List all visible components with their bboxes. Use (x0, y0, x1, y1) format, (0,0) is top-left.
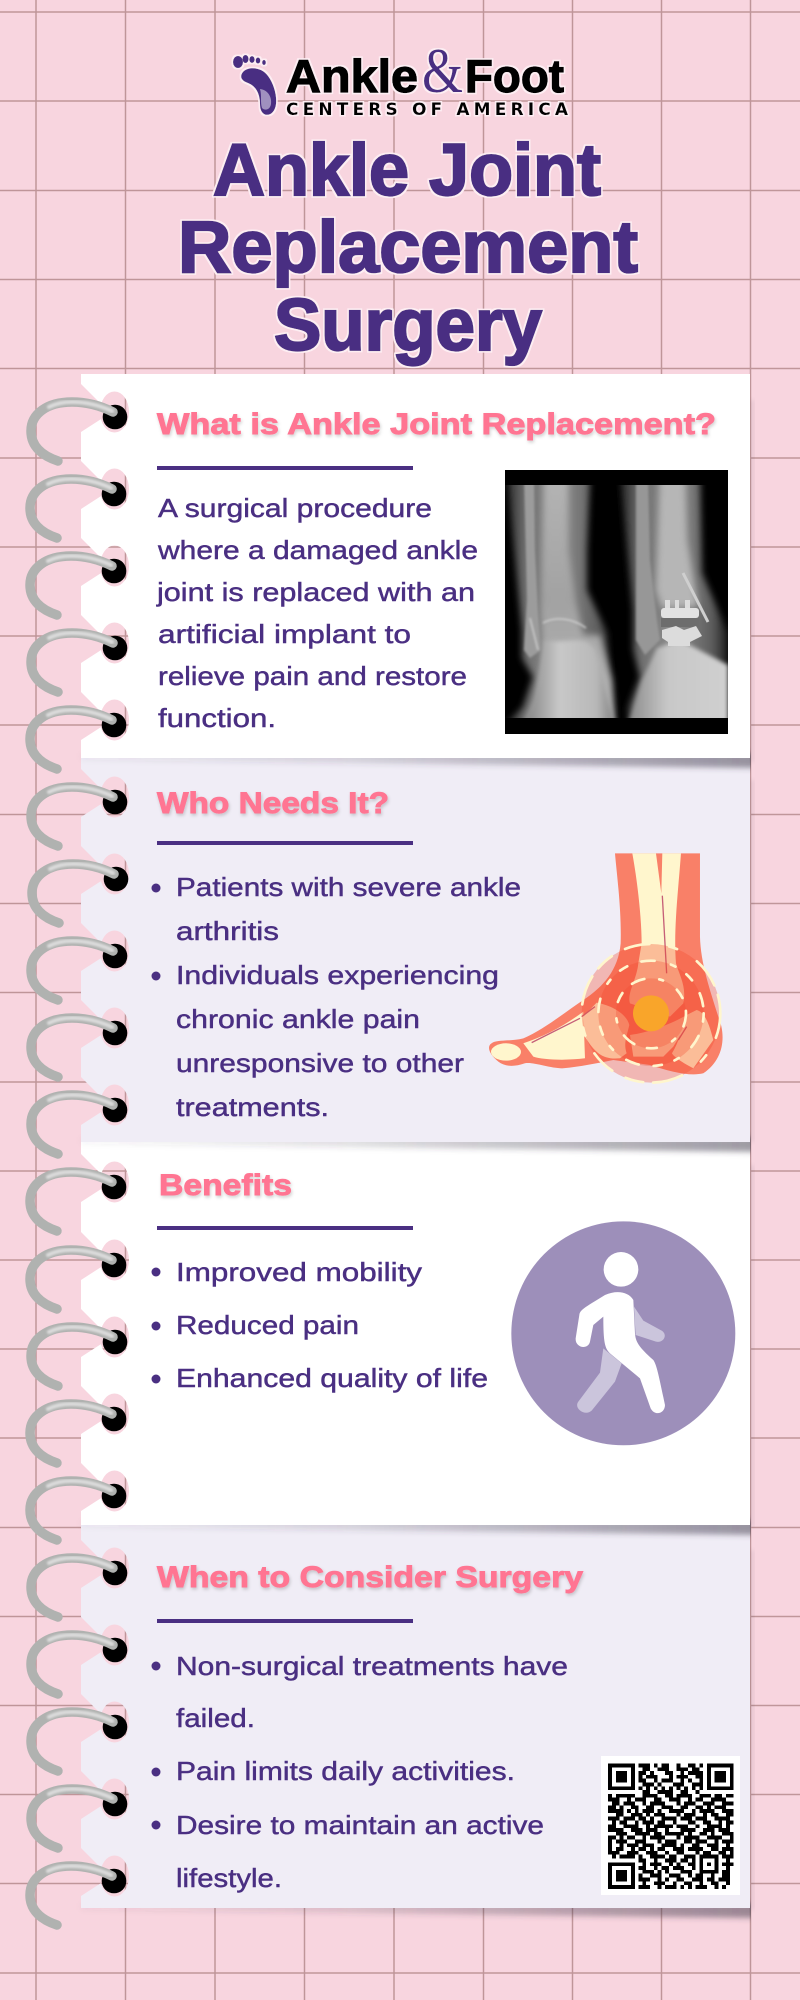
definition text: where a damaged ankle (157, 535, 478, 565)
heading: Benefits (159, 1169, 292, 1202)
bullet list: treatments. (176, 1092, 329, 1122)
title: Ankle Joint (213, 130, 601, 211)
panel: who needs it (81, 758, 760, 1152)
icon: footprint (233, 55, 276, 115)
definition text: artificial implant to (158, 619, 411, 649)
bullet list: lifestyle. (176, 1863, 282, 1893)
heading: When to Consider Surgery (157, 1561, 583, 1594)
bullet list: Desire to maintain an active (176, 1810, 544, 1840)
bullet list (152, 872, 521, 1122)
panel: benefits (81, 1142, 760, 1535)
heading: Who Needs It? (157, 787, 389, 820)
bullet list: Improved mobility (176, 1257, 422, 1287)
definition text: relieve pain and restore (158, 661, 467, 691)
divider (157, 1226, 413, 1230)
logo wordmark: Foot (465, 50, 564, 102)
definition text (156, 493, 478, 733)
spiral binding rings (30, 402, 128, 1925)
illustration: inflamed ankle joint (489, 853, 723, 1083)
bullet list: Enhanced quality of life (176, 1363, 488, 1393)
bullet list (152, 1257, 488, 1393)
image: ankle x-ray before and after implant (505, 470, 728, 734)
bullet list: Reduced pain (176, 1310, 359, 1340)
logo wordmark: CENTERS OF AMERICA (286, 100, 569, 120)
bullet list: Pain limits daily activities. (176, 1756, 515, 1786)
logo wordmark: & (422, 35, 463, 106)
bullet list: Individuals experiencing (176, 960, 499, 990)
panel: when to consider surgery (81, 1525, 760, 1918)
title (178, 130, 638, 366)
definition text: joint is replaced with an (156, 577, 475, 607)
logo: Ankle & Foot Centers of America (233, 35, 569, 120)
divider (157, 841, 413, 845)
QR code (601, 1756, 740, 1895)
divider (157, 1619, 413, 1623)
icon: walking person (511, 1221, 735, 1445)
definition text: A surgical procedure (158, 493, 432, 523)
panel: what is ankle joint replacement (81, 374, 760, 768)
bullet list: unresponsive to other (176, 1048, 464, 1078)
bullet list: Non-surgical treatments have (176, 1651, 568, 1681)
bullet list: Patients with severe ankle (176, 872, 521, 902)
title: Replacement (178, 207, 638, 288)
definition text: function. (158, 703, 276, 733)
bullet list: failed. (176, 1703, 255, 1733)
logo wordmark (286, 35, 569, 120)
heading: What is Ankle Joint Replacement? (157, 408, 716, 441)
bullet list: chronic ankle pain (176, 1004, 420, 1034)
divider (157, 466, 413, 470)
bullet list (152, 1651, 568, 1893)
bullet list: arthritis (176, 916, 279, 946)
logo wordmark: Ankle (286, 50, 418, 102)
title: Surgery (274, 285, 542, 366)
